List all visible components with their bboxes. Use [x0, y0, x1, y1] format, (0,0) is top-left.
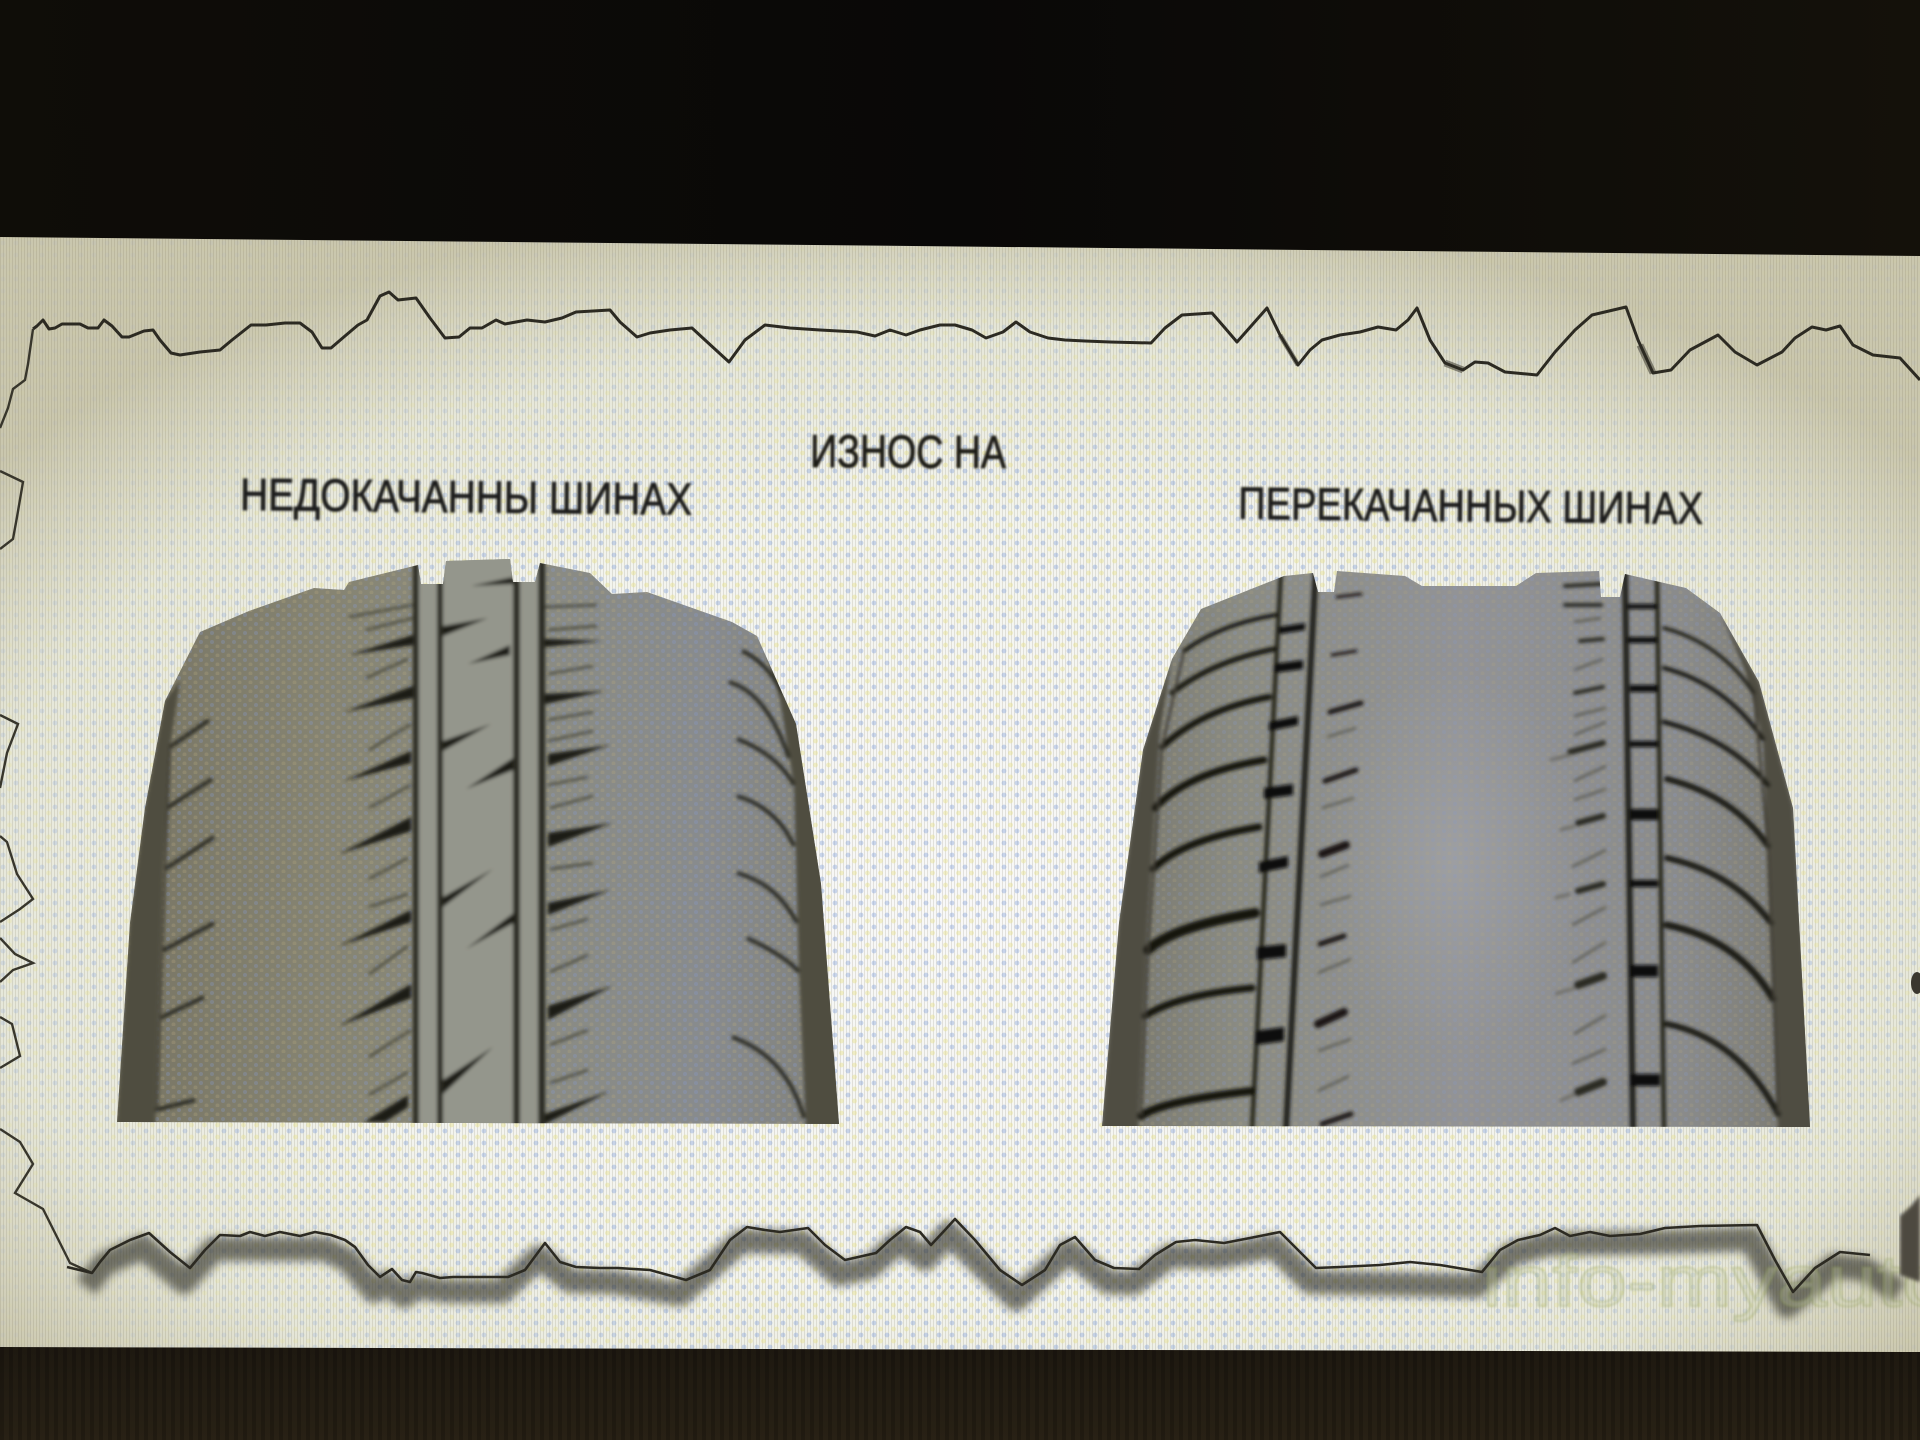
torn edge: bottom shadow: [86, 1233, 1899, 1306]
top dark band: monitor bezel: [0, 0, 1920, 270]
right shoulder curved sipes: [1664, 628, 1778, 1114]
main grooves: [413, 560, 545, 1130]
right shoulder curved sipes: [729, 651, 804, 1118]
left shoulder sipes: [155, 720, 214, 1110]
label: overinflated tires: ПЕРЕКАЧАННЫХ ШИНАХ: [1238, 478, 1703, 534]
bottom dark band: monitor bezel: [0, 1340, 1920, 1440]
rib sipes and shoulder sipes: [339, 577, 612, 1124]
sidewall strips: [100, 630, 850, 1130]
dark fragment at right edge: [1900, 1195, 1920, 1282]
inner sipes: [1318, 594, 1361, 1124]
shoulder boundary lines: [1141, 651, 1778, 1116]
torn edge: left side: [0, 329, 92, 1273]
tire: overinflated, worn center: [1090, 560, 1830, 1140]
left shoulder curved sipes: [1141, 615, 1276, 1116]
heading: wear on: ИЗНОС НА: [810, 425, 1007, 478]
torn edge: bottom line: [67, 1219, 1870, 1292]
rib bars: [1255, 604, 1660, 1086]
center ribs: [418, 555, 538, 1130]
thin sipes: [349, 605, 597, 1095]
tire: underinflated, worn shoulders: [117, 559, 839, 1124]
main grooves: [1252, 570, 1664, 1130]
panel: screen image: [0, 237, 1920, 1352]
watermark: info-myauto: info-myauto: [1482, 1242, 1920, 1322]
sidewall strips: [1090, 613, 1815, 1130]
torn edge: top line: [33, 292, 1920, 380]
label: underinflated tires: НЕДОКАЧАННЫ ШИНАХ: [240, 469, 692, 525]
